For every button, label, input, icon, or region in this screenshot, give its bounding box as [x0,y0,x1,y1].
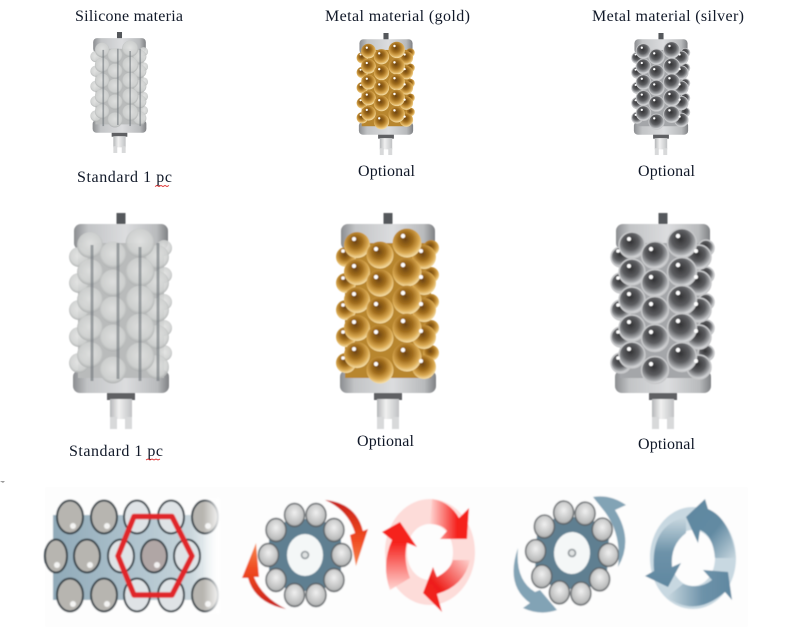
arrow: blue top right [593,496,626,567]
arrow: blue bottom left [514,548,557,613]
arrow: red clockwise bottom [242,543,286,609]
caption: optional gold small: Optional [358,163,416,180]
caption: standard large: Standard 1 pc [69,443,163,460]
icon: blue circular arrows [645,499,736,609]
small roller: silver [632,33,690,155]
stray mark [0,481,5,483]
diagram: blue rotating ball ring [523,499,621,607]
caption: optional gold large: Optional [357,433,415,450]
caption: optional silver large: Optional [638,436,696,453]
large roller: silicone [69,213,172,429]
label: gold material: Metal material (gold) [325,8,470,25]
caption: standard small: Standard 1 pc [77,169,172,186]
small roller: silicone [90,32,148,153]
icon: red circular arrows [382,499,475,612]
small roller: gold [357,33,415,155]
large roller: gold [336,213,439,429]
arrow: red clockwise top [325,500,368,566]
label: silicone material: Silicone materia [75,8,183,25]
diagram: red rotating ball ring [258,504,352,606]
large roller: silver [611,213,714,429]
diagram: hexagonal ball arrangement [45,498,230,614]
panel: motion diagrams [45,487,748,627]
caption: optional silver small: Optional [638,163,696,180]
label: silver material: Metal material (silver) [592,8,744,25]
